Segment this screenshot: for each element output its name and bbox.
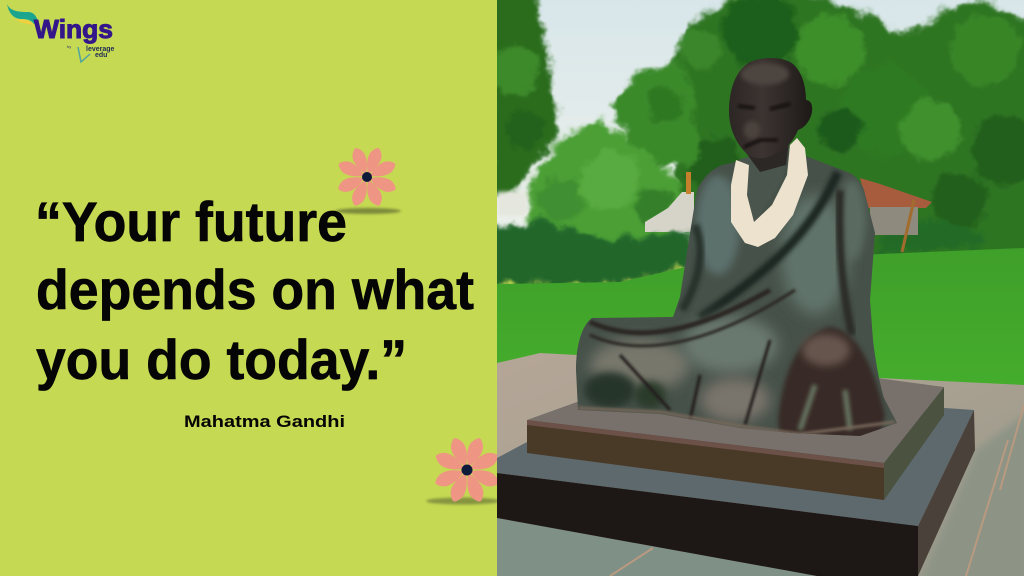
chest [738,145,790,162]
flower centre [462,464,472,476]
stone plinth [497,378,975,576]
lap shadows [584,372,636,408]
distant haze left [497,192,527,216]
shawl shadow [700,172,838,318]
flower centre [362,172,372,182]
attribution: Mahatma Gandhi [184,412,345,431]
quote: depends on what [36,258,474,321]
lower tier top [497,408,974,526]
flower top [335,146,401,214]
knee [778,327,885,440]
neck [746,144,789,172]
quote: you do today.” [36,328,407,391]
lawn [497,248,1024,390]
flower shadow [426,498,500,504]
drape hem [578,408,895,434]
logo wordmark: Wings [34,14,113,44]
lap highlights [590,339,690,391]
distant building left [645,172,694,232]
statue [570,58,905,445]
petals [436,438,497,502]
left tree [490,0,560,195]
upper tier front [527,420,884,500]
robed body [570,145,905,445]
lower tier right [918,410,975,576]
flower shadow [335,208,401,214]
logo: Wings by leverage edu: edu [95,52,107,59]
middle tree [612,62,700,170]
background trees [490,0,1024,270]
petals [336,146,398,208]
photo: statue of Mahatma Gandhi in a garden [490,0,1024,576]
leverage mark [78,47,90,62]
head [729,58,812,158]
white garland [731,138,808,247]
paving lower right [918,410,1024,576]
paving lower left [497,518,817,576]
upper tier right [884,387,944,500]
flower bottom [426,436,501,504]
logo: Wings by leverage edu [7,4,115,62]
green background panel [0,0,497,576]
logo swoosh [7,4,38,24]
sleeve highlights [696,175,740,275]
lap folds [590,290,770,333]
lower tier front [497,473,918,576]
head highlights [741,63,789,85]
lower-left tree [528,118,680,270]
facial features [738,104,790,147]
main canopy [672,0,1024,270]
bushes [490,218,982,285]
quote [35,190,474,391]
by label: by [67,44,71,49]
terrace paving [497,353,1024,576]
distant building right [860,178,932,252]
quote: “Your future [35,190,347,253]
upper tier top [527,378,944,463]
sky [497,0,1024,240]
leverage edu text: leverage [86,46,115,53]
